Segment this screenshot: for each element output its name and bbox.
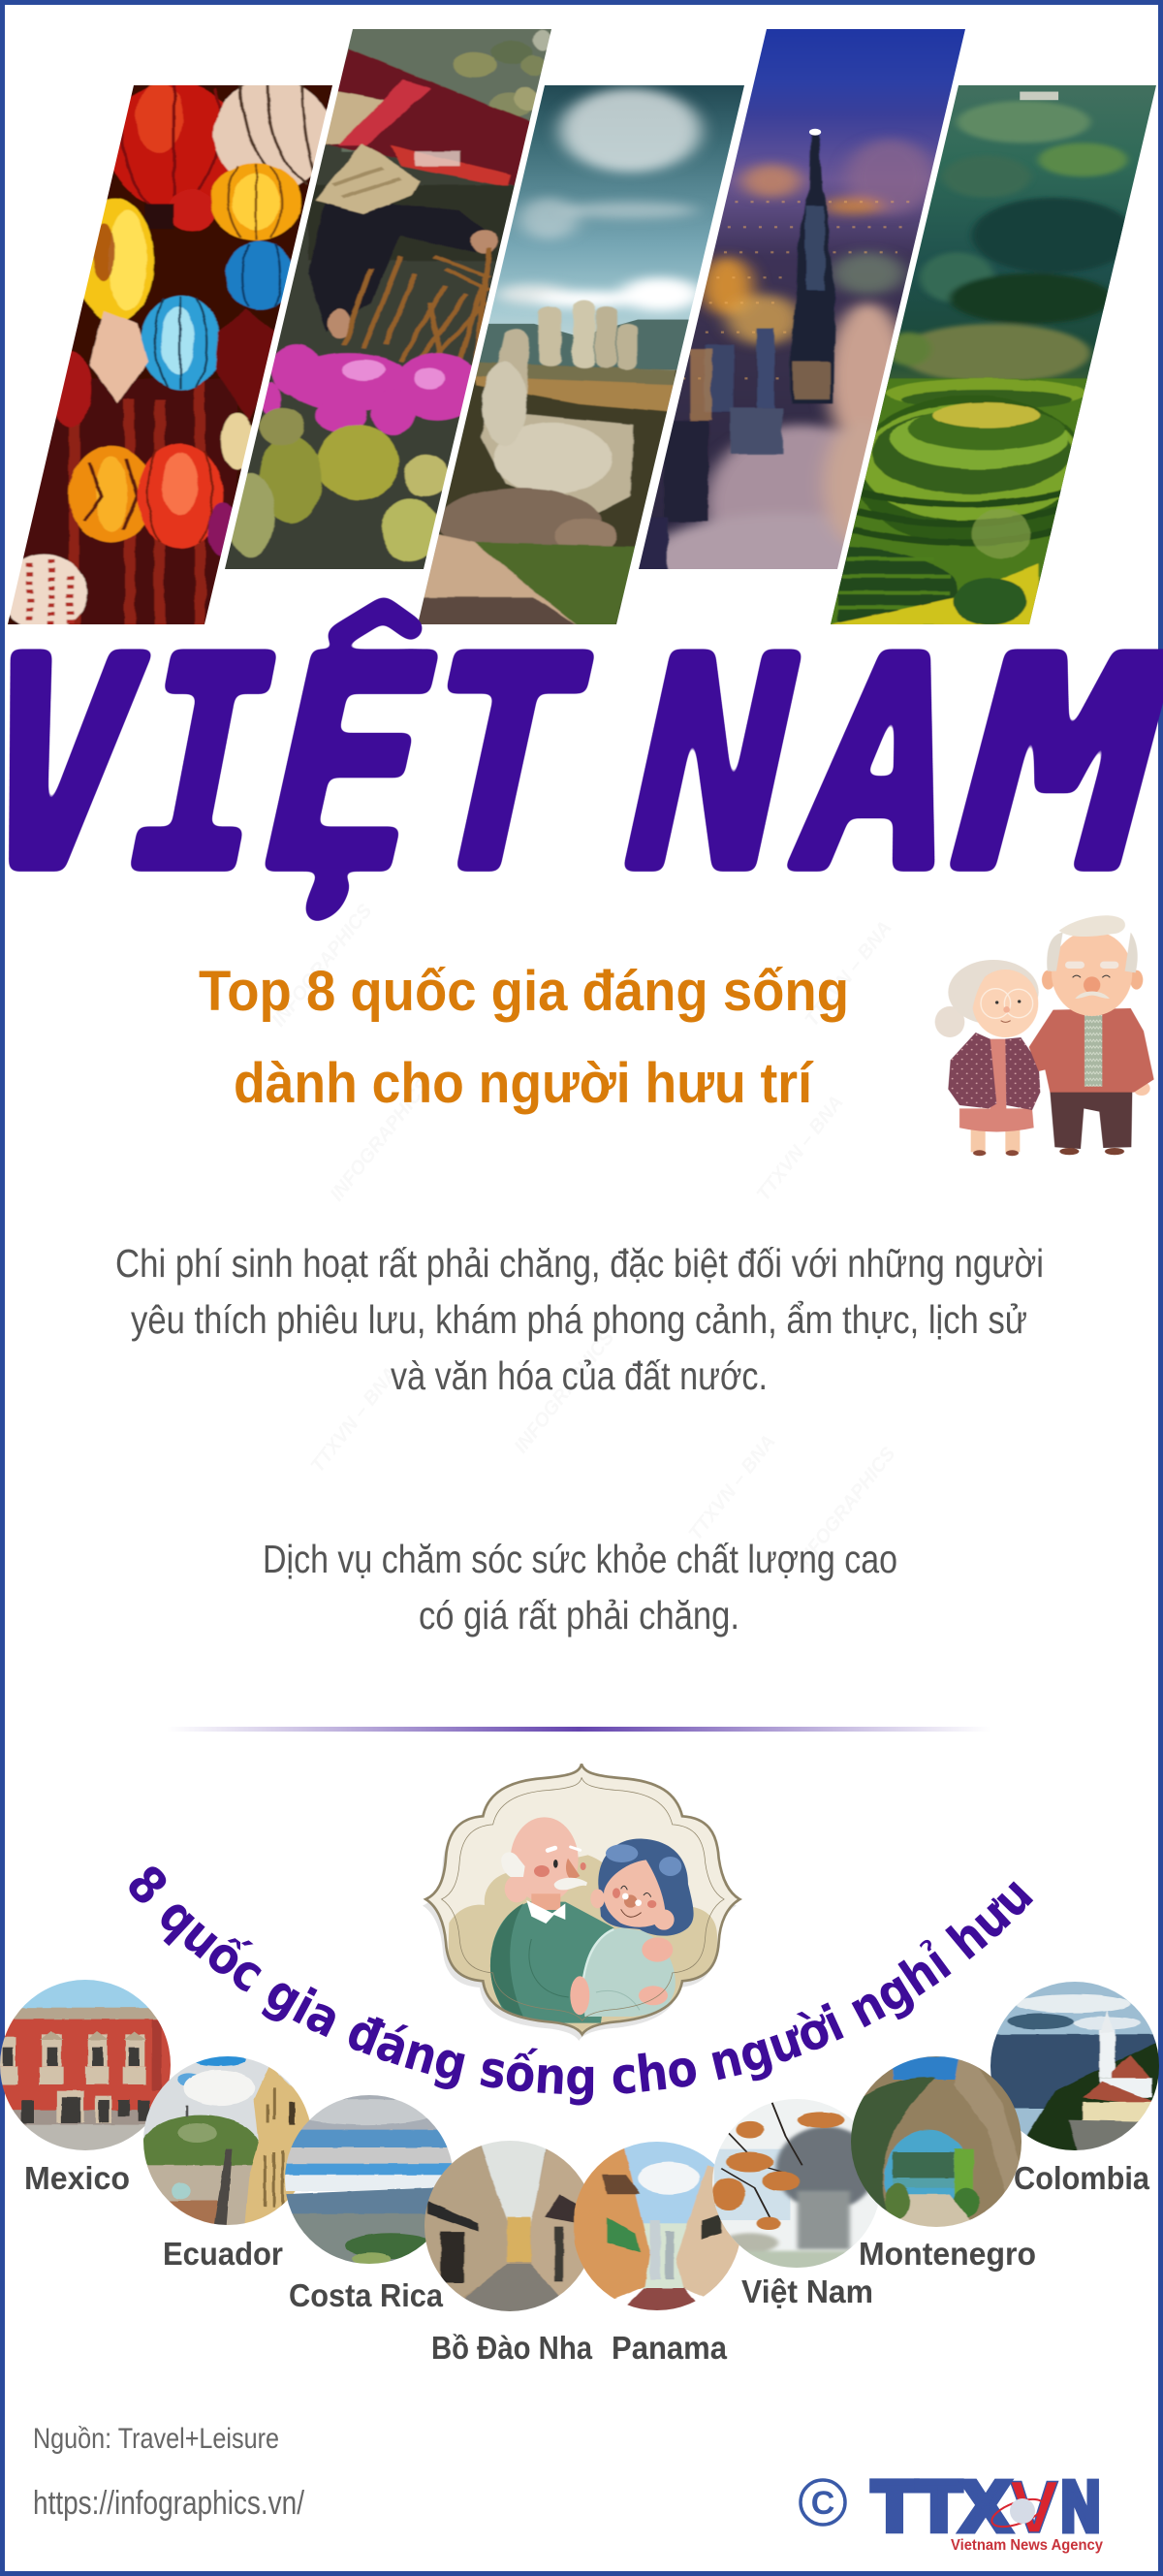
source text: Nguồn: Travel+Leisure xyxy=(33,2423,279,2455)
label: Mexico: Mexico xyxy=(24,2160,130,2196)
watermark: TTXVN – BNA xyxy=(753,1092,848,1205)
label: Costa Rica: Costa Rica xyxy=(289,2277,444,2313)
title: I xyxy=(127,595,279,938)
label: Panama: Panama xyxy=(612,2330,728,2366)
watermark: INFOGRAPHICS xyxy=(268,900,377,1031)
photo: Costa Rica xyxy=(285,2095,452,2264)
text block: intro paragraph 1 xyxy=(115,1241,1044,1398)
photo: Ecuador xyxy=(143,2056,310,2225)
watermark: INFOGRAPHICS xyxy=(792,1443,900,1574)
title: M xyxy=(948,595,1163,938)
title: T xyxy=(416,594,597,938)
title xyxy=(0,591,1163,938)
panel: Landmark 81 city photo xyxy=(631,25,979,606)
photo: Mexico xyxy=(0,1980,171,2150)
watermark: TTXVN – BNA xyxy=(685,1431,780,1544)
label: Bồ Đào Nha: Bồ Đào Nha xyxy=(431,2330,593,2366)
icon: copyright symbol xyxy=(801,2480,845,2525)
title: A xyxy=(784,594,965,938)
subtitle: dành cho người hưu trí xyxy=(234,1052,814,1115)
watermark: INFOGRAPHICS xyxy=(511,1326,619,1457)
curved heading: 8 quốc gia đáng sống cho người nghỉ hưu xyxy=(129,1866,1033,2106)
photo: Colombia xyxy=(990,1982,1159,2150)
fingers xyxy=(539,307,561,366)
label: Colombia: Colombia xyxy=(1014,2160,1150,2196)
photo: Vietnam xyxy=(712,2099,878,2268)
panel: lanterns photo xyxy=(8,85,332,624)
logo: TTXVN: N xyxy=(1061,2468,1100,2546)
label: Ecuador: Ecuador xyxy=(163,2236,283,2272)
logo: TTXVN: Vietnam News Agency xyxy=(951,2537,1103,2554)
logo: TTXVN: TTX xyxy=(872,2468,1010,2546)
title: N xyxy=(622,594,804,938)
panel: lotus boat photo xyxy=(225,29,551,569)
watermark xyxy=(268,900,900,1574)
icon: couple in ornate frame xyxy=(423,1764,739,2041)
label: Việt Nam: Việt Nam xyxy=(741,2274,873,2309)
text block: intro paragraph 2 xyxy=(263,1537,897,1638)
icon: elderly couple watercolor xyxy=(935,915,1154,1156)
icon: copyright symbol: C xyxy=(811,2485,834,2522)
panel: golden bridge photo xyxy=(419,85,744,624)
logo: TTXVN: V xyxy=(1010,2466,1058,2549)
title: Ệ xyxy=(261,591,442,938)
text block: intro paragraph 2: có giá rất phải chăng. xyxy=(419,1593,739,1638)
subtitle xyxy=(199,960,849,1115)
label: Montenegro: Montenegro xyxy=(859,2236,1036,2272)
text block: intro paragraph 1: và văn hóa của đất nước. xyxy=(391,1353,768,1398)
url text: https://infographics.vn/ xyxy=(33,2485,304,2522)
bridge deck xyxy=(475,376,674,412)
watermark: TTXVN – BNA xyxy=(802,917,896,1031)
logo: TTXVN xyxy=(872,2466,1103,2554)
watermark: TTXVN – BNA xyxy=(307,1363,402,1477)
panel: rice terraces photo xyxy=(816,80,1163,635)
watermark: INFOGRAPHICS xyxy=(327,1074,435,1205)
palm and thumb xyxy=(481,329,634,515)
photo: Portugal xyxy=(424,2141,583,2311)
text block: intro paragraph 1: yêu thích phiêu lưu, khám phá phong cảnh, ẩm thực, lịch sử xyxy=(131,1297,1027,1342)
country labels xyxy=(24,2160,1150,2366)
photo: Montenegro xyxy=(851,2056,1022,2227)
text block: intro paragraph 2: Dịch vụ chăm sóc sức khỏe chất lượng cao xyxy=(263,1537,897,1581)
subtitle: Top 8 quốc gia đáng sống xyxy=(199,960,849,1023)
photo: Panama xyxy=(574,2135,745,2315)
